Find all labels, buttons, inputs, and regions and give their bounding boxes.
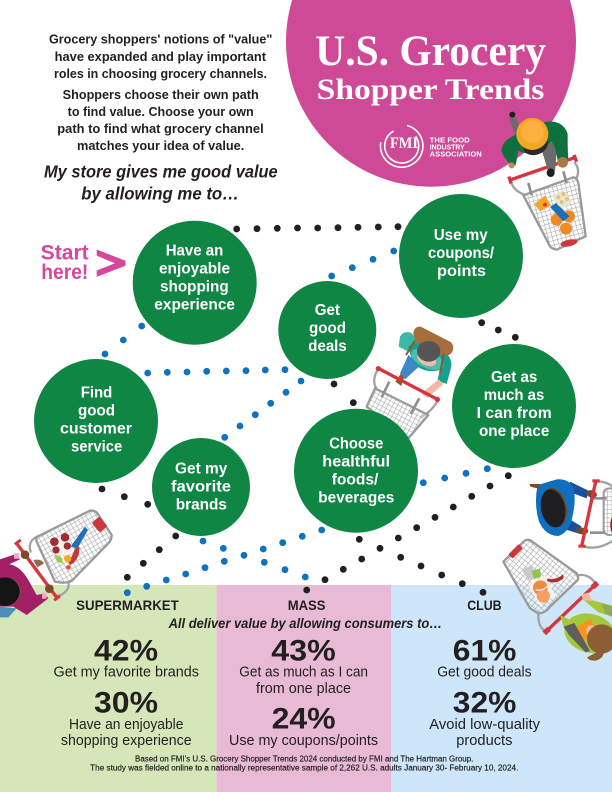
mass column: 24% [272,703,336,736]
title [315,28,546,106]
title circle [286,0,576,187]
circle: use my coupons/points: Use my [434,227,488,244]
circle: find good customer service: good [78,402,115,419]
club column: 61% [453,635,516,668]
title: Shopper Trends [317,73,544,106]
panel: supermarket background [0,585,217,792]
icon: shopper with orange turban and cart [502,112,586,250]
icon: shopper in magenta with cart [0,511,112,617]
circle: find good customer service: Find [81,384,112,401]
supermarket column: Have an enjoyable [69,717,183,733]
start here label: Start [41,241,89,264]
supermarket column: shopping experience [61,733,192,749]
FMI logo: ASSOCIATION [430,152,482,159]
intro paragraph 1 [49,33,272,81]
circle: get as much as I can from one place: one place [479,423,550,440]
circle: choose healthful foods/beverages: Choose [329,435,384,452]
circle: have an enjoyable shopping experience: Have an [166,243,223,260]
footnote: Based on FMI's U.S. Grocery Shopper Trends 2024 conducted by FMI and The Hartman Group. [135,754,473,763]
circle: get as much as I can from one place: I can from [477,405,552,422]
club column: 32% [453,687,516,720]
circle: get as much as I can from one place: Get as [491,369,537,386]
circle: choose healthful foods/beverages [294,409,418,533]
circle: get my favorite brands [152,438,250,536]
club column: CLUB [467,597,502,613]
start here label [41,241,89,284]
circle: have an enjoyable shopping experience [133,221,257,345]
circle: get good deals: Get [315,302,340,319]
circle: find good customer service: customer [60,420,132,437]
black dotted paths [99,223,519,596]
circle: use my coupons/points [399,194,523,318]
circle: use my coupons/points: coupons/ [428,245,495,262]
arrow: start chevron [97,250,126,277]
intro paragraph 2: path to find what grocery channel [57,122,264,136]
intro paragraph 1: Grocery shoppers' notions of "value" [49,33,272,47]
circle: get good deals: good [309,320,346,337]
circle: have an enjoyable shopping experience: experience [154,297,235,314]
circle: get my favorite brands: favorite [171,478,231,495]
circle: get as much as I can from one place: much as [484,387,544,404]
circle: use my coupons/points: points [437,263,486,280]
mass column: 43% [271,635,336,668]
circle: choose healthful foods/beverages: foods/ [332,471,379,488]
footnote [90,754,518,773]
FMI logo: THE FOOD [430,138,470,145]
circle: get as much as I can from one place [452,344,576,468]
club column: Get good deals [437,665,532,681]
panel: club background [391,585,612,792]
circle: choose healthful foods/beverages: beverages [318,489,394,506]
circle: have an enjoyable shopping experience: enjoyable [159,260,230,278]
icon: shopper in blue with cart [530,479,612,548]
blue dotted paths [102,248,491,596]
mass column: Get as much as I can [239,665,368,681]
circle: find good customer service: service [71,438,123,455]
mass column [229,597,378,749]
club column: Avoid low-quality [429,717,541,733]
circle: find good customer service [34,359,158,483]
icon: shopper in lime with cart [503,540,612,661]
circle: choose healthful foods/beverages: healthful [322,453,390,470]
circle: get my favorite brands: Get my [175,460,228,477]
footnote: The study was fielded online to a nationally representative sample of 2,262 U.S. adults January 30- February 10, 2024. [90,764,518,773]
circle: have an enjoyable shopping experience: shopping [160,279,229,296]
subheading [44,162,278,203]
intro paragraph 2: matches your idea of value. [77,139,244,153]
title: U.S. Grocery [315,28,546,75]
intro paragraph 2 [57,88,264,153]
supermarket column: SUPERMARKET [76,597,179,613]
club column: products [456,733,512,749]
club column [429,597,541,749]
FMI logo [376,120,482,172]
mass column: from one place [256,681,351,697]
intro paragraph 2: to find value. Choose your own [68,105,254,119]
supermarket column [54,597,199,749]
supermarket column: 30% [94,687,158,720]
intro paragraph 1: have expanded and play important [55,50,267,64]
supermarket column: Get my favorite brands [54,665,199,681]
icon: shopper with backpack and cart [367,327,453,438]
supermarket column: 42% [94,635,158,668]
intro paragraph 2: Shoppers choose their own path [63,88,259,102]
mass column: Use my coupons/points [229,733,378,749]
panel: mass background [217,585,391,792]
intro paragraph 1: roles in choosing grocery channels. [54,67,267,81]
circle: get good deals: deals [308,338,347,355]
heading: all deliver value: All deliver value by allowing consumers to… [168,615,442,631]
subheading: My store gives me good value [44,162,278,182]
subheading: by allowing me to… [81,183,239,203]
circle: get good deals [278,281,376,379]
start here label: here! [41,261,88,284]
FMI logo: INDUSTRY [430,145,465,152]
mass column: MASS [288,597,326,613]
FMI logo: FMI [390,135,418,152]
circle: get my favorite brands: brands [176,496,227,513]
